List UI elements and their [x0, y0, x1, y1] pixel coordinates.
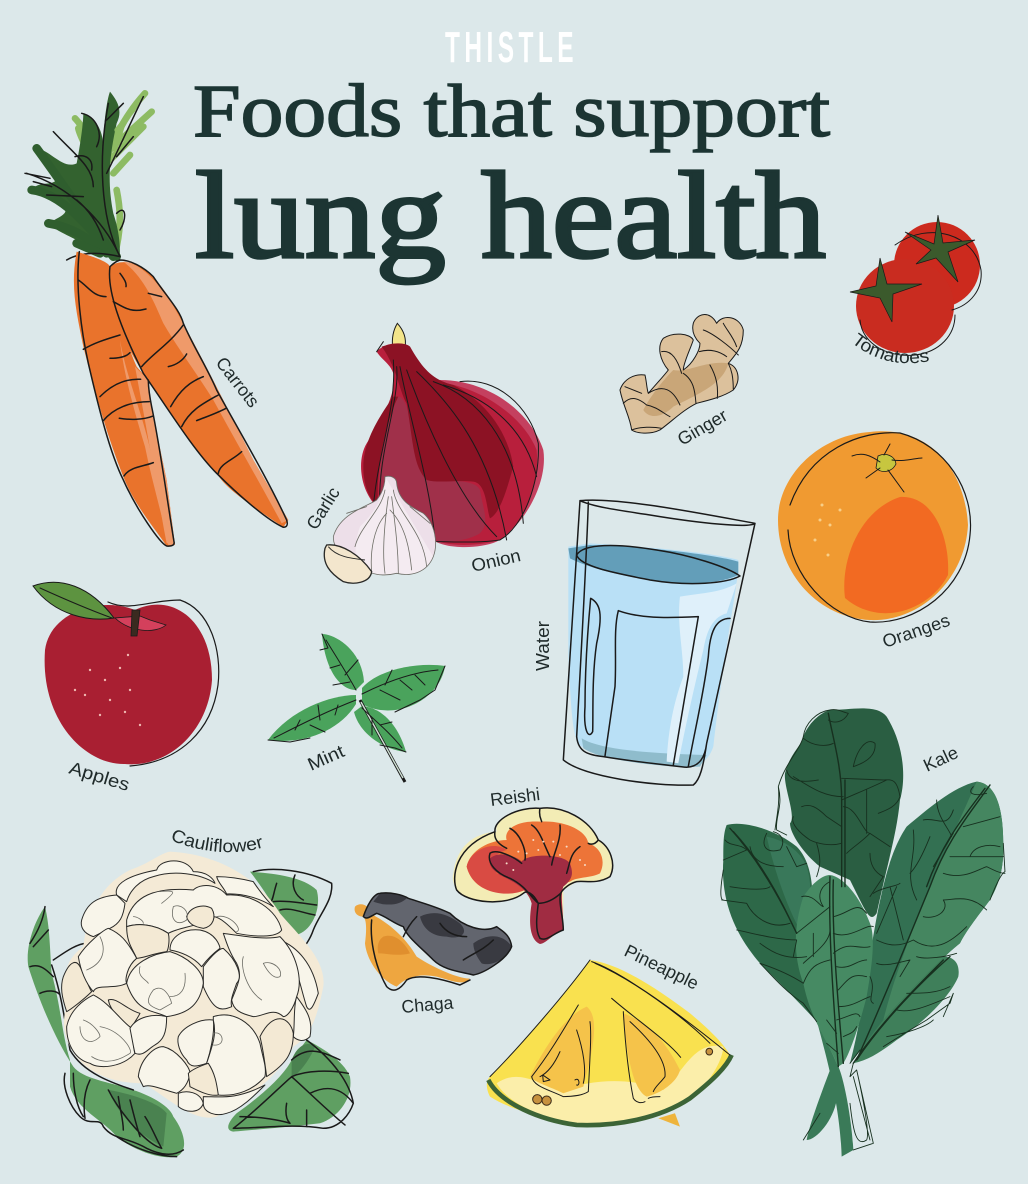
kale veins: [730, 713, 990, 1067]
title: [193, 70, 830, 284]
illustration: kale: [721, 708, 1005, 1157]
label: Water: Water: [533, 621, 553, 671]
label: Tomatoes: Tomatoes: [855, 332, 929, 364]
right carrot: [110, 262, 288, 527]
left leaf: [723, 824, 817, 1022]
label: Chaga: Chaga: [401, 992, 455, 1017]
pineapple: [487, 960, 730, 1125]
label: Reishi: Reishi: [489, 784, 541, 810]
illustration: orange: [778, 431, 971, 622]
garlic clove: [324, 545, 372, 583]
front leaf: [796, 875, 873, 1067]
illustration: carrots: [25, 92, 288, 546]
label: Garlic: Garlic: [302, 484, 344, 533]
brand logo: Thistle: THISTLE: [445, 23, 578, 72]
illustration: tomatoes: [850, 215, 981, 355]
title: Foods that support: [193, 70, 830, 153]
back leaf: [785, 708, 903, 917]
label: Kale: Kale: [920, 742, 961, 776]
illustration: reishi and chaga and pineapple: [355, 808, 732, 1127]
label: Mint: Mint: [304, 741, 347, 775]
title: lung health: [195, 147, 826, 284]
label: Pineapple: Pineapple: [621, 941, 702, 994]
label: Oranges: Oranges: [880, 610, 952, 652]
illustration: onion: [324, 315, 743, 583]
label: Cauliflower: Cauliflower: [172, 830, 262, 852]
label: Ginger: Ginger: [674, 405, 731, 449]
carrot greens: [32, 92, 152, 257]
garlic: [333, 476, 436, 575]
kale stems: [807, 1020, 853, 1157]
illustration: cauliflower: [28, 852, 353, 1157]
cauliflower leaves: [28, 907, 184, 1157]
chaga: [355, 904, 470, 987]
illustration: mint: [268, 634, 445, 782]
illustration: apple: [33, 582, 219, 766]
ginger: [620, 315, 743, 433]
label: Onion: Onion: [469, 545, 523, 576]
illustration: water glass: [563, 500, 755, 785]
label: Apples: Apples: [67, 758, 132, 795]
lower right leaf: [853, 957, 959, 1063]
reishi: [453, 808, 613, 943]
right leaf: [850, 782, 1003, 1063]
cauliflower head: [64, 852, 324, 1118]
left carrot: [74, 252, 175, 546]
label: Carrots: Carrots: [212, 353, 263, 411]
